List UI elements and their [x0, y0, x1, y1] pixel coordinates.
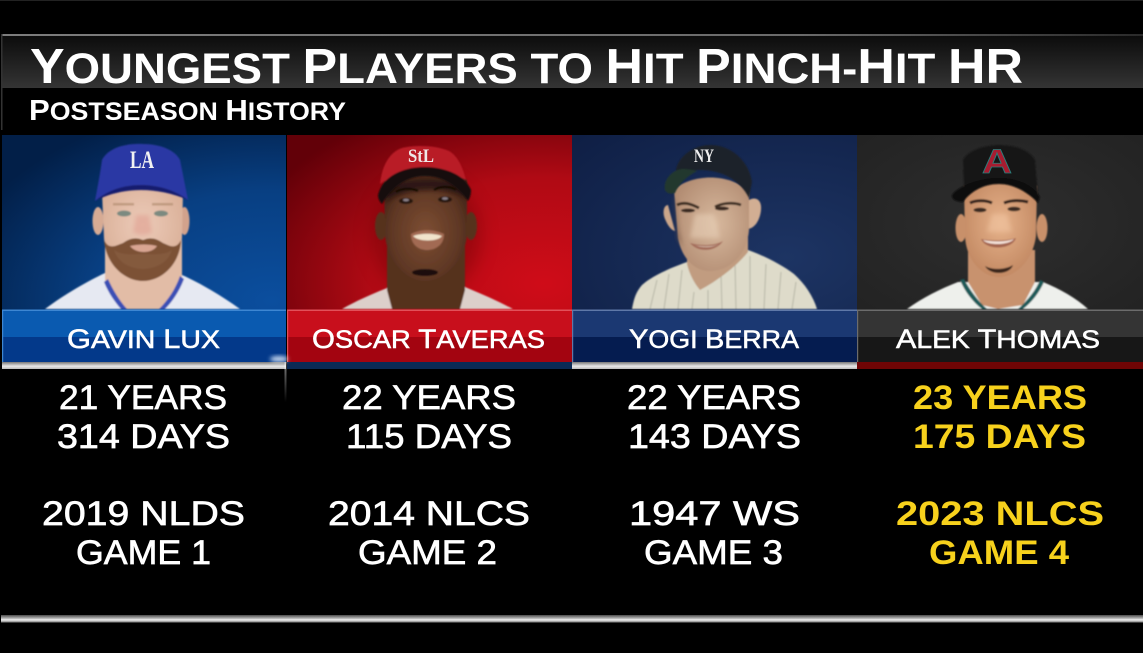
stats: Alek Thomas (highlighted) — [896, 379, 1104, 572]
nameplate: Alek Thomas: ALEK THOMAS — [896, 324, 1100, 354]
portrait: Alek Thomas — [907, 143, 1088, 309]
title: YOUNGEST PLAYERS TO HIT PINCH-HIT HR — [30, 40, 1023, 94]
stats: Alek Thomas (highlighted): 2023 NLCS — [896, 495, 1104, 533]
footer bar — [1, 615, 1143, 622]
accent glint — [270, 356, 288, 402]
stats: Yogi Berra: 1947 WS — [629, 495, 800, 533]
stats: Gavin Lux — [42, 379, 245, 572]
stats: Alek Thomas (highlighted): GAME 4 — [929, 534, 1069, 572]
portrait: Yogi Berra — [632, 145, 817, 309]
stats: Oscar Taveras — [328, 379, 530, 572]
nameplate: Yogi Berra: YOGI BERRA — [629, 324, 799, 354]
stats: Oscar Taveras: 2014 NLCS — [328, 495, 530, 533]
icon: Dodgers cap logo: LA — [130, 147, 154, 174]
stats: Alek Thomas (highlighted): 175 DAYS — [913, 418, 1086, 456]
nameplate: Oscar Taveras — [287, 310, 572, 369]
nameplate: Oscar Taveras: OSCAR TAVERAS — [312, 324, 545, 354]
panel: Oscar Taveras — [287, 135, 572, 369]
nameplate: Gavin Lux: GAVIN LUX — [67, 324, 220, 354]
stats: Gavin Lux: GAME 1 — [76, 534, 211, 572]
stats: Alek Thomas (highlighted): 23 YEARS — [913, 379, 1087, 417]
panel: Gavin Lux — [2, 135, 286, 369]
icon: Diamondbacks cap logo: A — [982, 143, 1012, 181]
stats: Yogi Berra — [627, 379, 801, 572]
panel: Yogi Berra — [572, 135, 857, 369]
stats: Gavin Lux: 314 DAYS — [57, 418, 230, 456]
header bar — [0, 0, 1143, 130]
nameplate: Yogi Berra — [572, 310, 857, 369]
icon: Yankees cap logo: NY — [694, 146, 714, 167]
portrait: Oscar Taveras — [342, 146, 513, 309]
stats: Oscar Taveras: 115 DAYS — [346, 418, 512, 456]
nameplate: Alek Thomas — [857, 310, 1143, 369]
stats: Yogi Berra: 22 YEARS — [627, 379, 801, 417]
portrait: Gavin Lux — [45, 144, 240, 309]
stats: Oscar Taveras: GAME 2 — [358, 534, 497, 572]
stats: Yogi Berra: 143 DAYS — [628, 418, 801, 456]
nameplate: Gavin Lux — [2, 310, 286, 369]
stats: Gavin Lux: 21 YEARS — [59, 379, 227, 417]
stats: Yogi Berra: GAME 3 — [644, 534, 783, 572]
icon: Cardinals cap logo: StL — [408, 146, 434, 167]
panel: Alek Thomas — [857, 135, 1143, 369]
subtitle: POSTSEASON HISTORY — [29, 95, 346, 127]
stats: Gavin Lux: 2019 NLDS — [42, 495, 245, 533]
stats: Oscar Taveras: 22 YEARS — [342, 379, 516, 417]
